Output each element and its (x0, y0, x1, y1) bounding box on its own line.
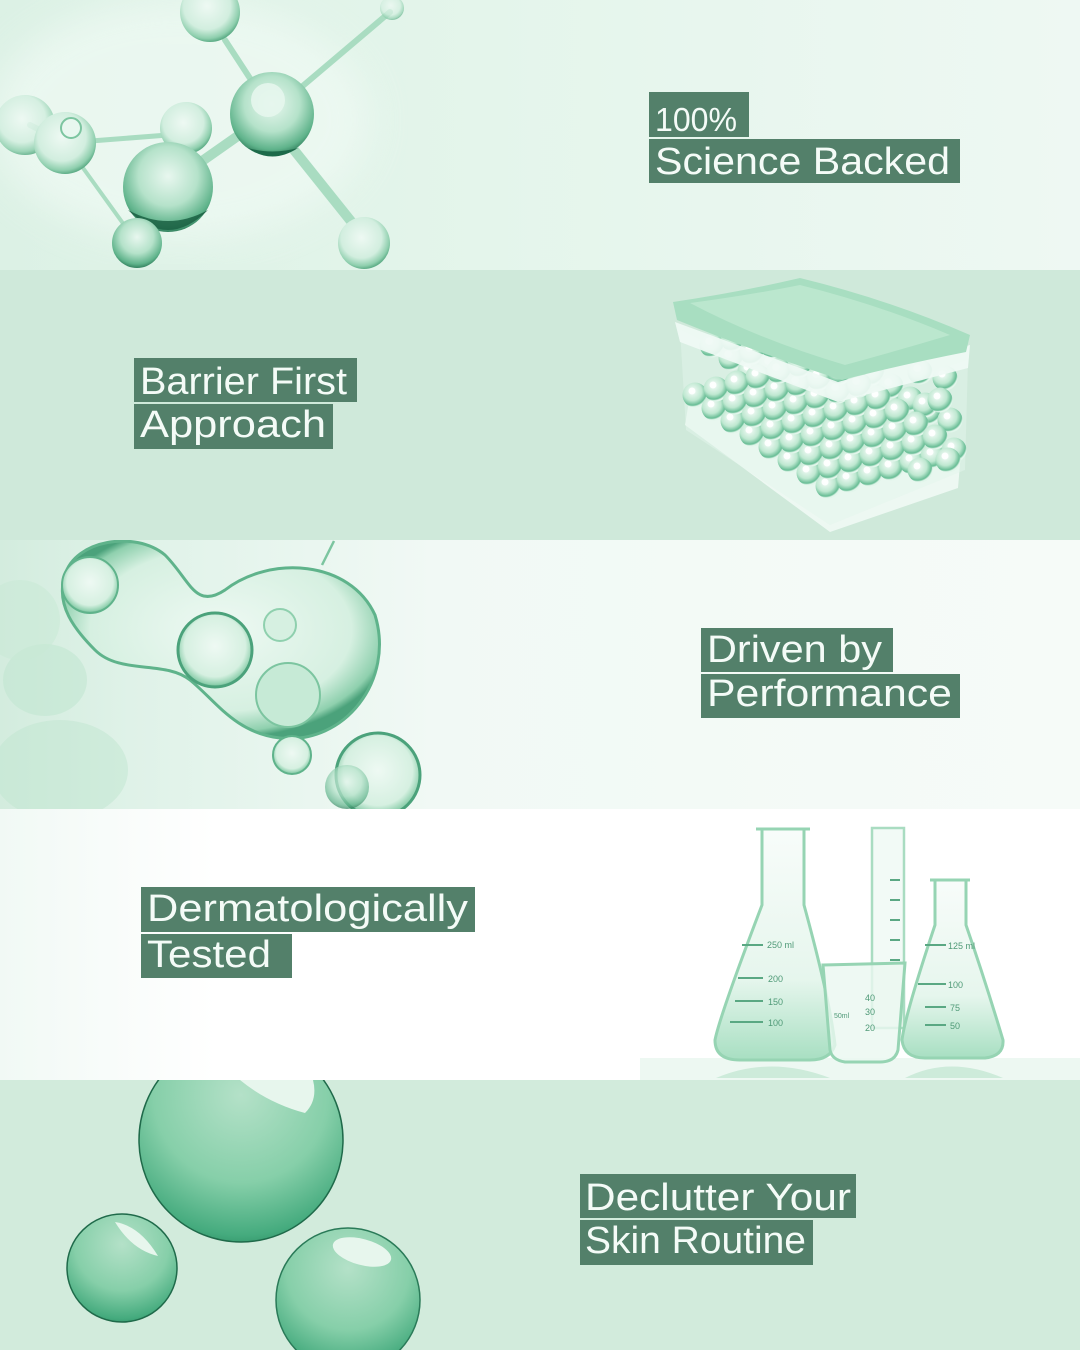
illustration: glass molecule (0, 0, 404, 269)
label: Declutter Your Skin Routine: Skin Routine (585, 1220, 806, 1262)
illustration: laboratory glassware: 200 (768, 974, 783, 984)
illustration: laboratory glassware: 30 (865, 1007, 875, 1017)
label: Dermatologically Tested: Tested (147, 934, 271, 976)
illustration: laboratory glassware: 100 (948, 980, 963, 990)
panel: dermatologically tested (0, 809, 1080, 1080)
illustration: laboratory glassware: 40 (865, 993, 875, 1003)
label: Dermatologically Tested (141, 887, 475, 978)
label: Driven by Performance: Driven by (707, 629, 882, 671)
label: 100% Science Backed: 100% (655, 101, 737, 138)
label: Barrier First Approach: Approach (140, 404, 326, 446)
illustration: laboratory glassware: 150 (768, 997, 783, 1007)
label: Barrier First Approach: Barrier First (140, 361, 347, 403)
illustration: laboratory glassware: 75 (950, 1003, 960, 1013)
illustration: laboratory glassware: 125 ml (948, 941, 975, 951)
label: Declutter Your Skin Routine: Declutter Your (585, 1177, 851, 1219)
illustration: laboratory glassware (715, 828, 1003, 1078)
illustration: laboratory glassware: 100 (768, 1018, 783, 1028)
illustration: laboratory glassware: 250 ml (767, 940, 794, 950)
label: 100% Science Backed: Science Backed (655, 141, 950, 183)
illustration: skin barrier gel cube (673, 278, 970, 532)
label: Dermatologically Tested: Dermatologically (147, 888, 468, 930)
label: 100% Science Backed (649, 92, 960, 183)
label: Declutter Your Skin Routine (580, 1174, 856, 1265)
illustration: laboratory glassware: 50ml (834, 1013, 850, 1020)
illustration: laboratory glassware: 20 (865, 1023, 875, 1033)
panel: 100% science backed (0, 0, 1080, 270)
label: Driven by Performance: Performance (707, 673, 952, 715)
panel: barrier first approach (0, 270, 1080, 540)
panel: driven by performance (0, 540, 1080, 820)
panel: declutter your skin routine (0, 1080, 1080, 1350)
label: Barrier First Approach (134, 358, 357, 449)
illustration: laboratory glassware: 50 (950, 1021, 960, 1031)
label: Driven by Performance (701, 628, 960, 718)
illustration: serum droplets (66, 1080, 421, 1350)
illustration: liquid bubbles (0, 541, 420, 820)
